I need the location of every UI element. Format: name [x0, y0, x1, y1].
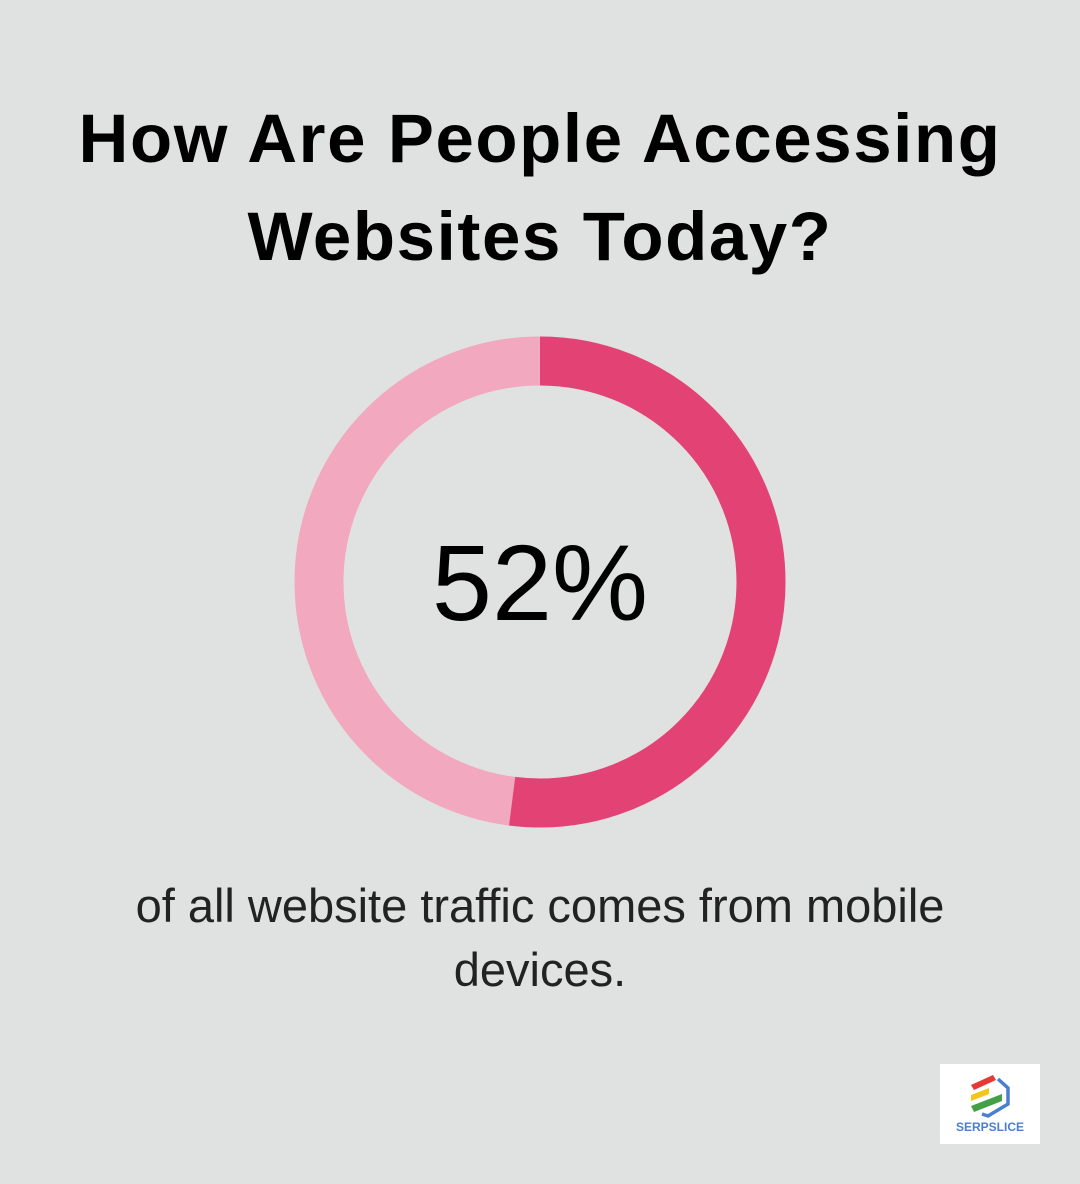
title: How Are People Accessing: [79, 100, 1001, 177]
title: [79, 100, 1001, 275]
percentage value: 52%: [432, 522, 648, 643]
description text: of all website traffic comes from mobile: [136, 879, 944, 932]
logo: SERPSLICE: SERPSLICE: [956, 1120, 1024, 1134]
description text: [136, 879, 944, 996]
description text: devices.: [454, 943, 626, 996]
logo: SERPSLICE: [940, 1064, 1040, 1144]
title: Websites Today?: [247, 198, 833, 275]
